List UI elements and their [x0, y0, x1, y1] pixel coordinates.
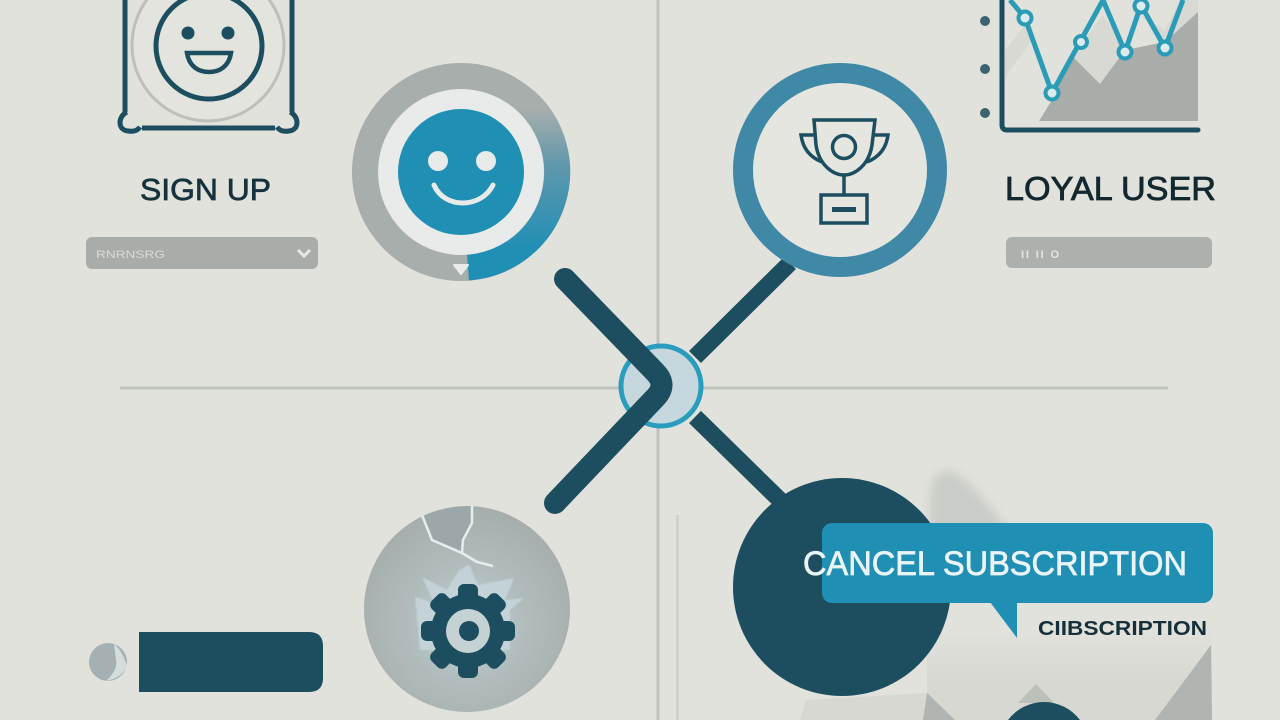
icon: gear — [421, 584, 515, 678]
callout: cancel subscription: CANCEL SUBSCRIPTION — [803, 545, 1187, 583]
dropdown: loyal user: II II O — [1021, 249, 1059, 261]
dropdown: loyal user — [1006, 237, 1212, 268]
icon: trophy — [801, 120, 888, 223]
dropdown: sign up — [86, 237, 318, 269]
arrow: chevron from sign up to cancel — [555, 279, 662, 503]
heading: sign up: SIGN UP — [140, 172, 271, 207]
connector arrows — [695, 263, 790, 510]
arrow: connector to loyal user — [695, 263, 790, 357]
arrow: connector to cancel subscription — [695, 417, 790, 510]
starburst — [415, 565, 524, 650]
line and area chart — [980, 0, 1198, 130]
center hub — [555, 279, 701, 503]
background shapes: faded mountains — [800, 470, 1212, 720]
icon: framed smiley — [120, 0, 297, 131]
bottom-left block — [89, 632, 323, 692]
dropdown: sign up: RNRNSRG — [96, 249, 165, 261]
icon: small blob — [89, 643, 127, 681]
panel: sign up — [86, 0, 318, 269]
callout: cancel subscription — [803, 523, 1213, 638]
node: broken gear — [364, 505, 570, 712]
node: smiley — [352, 63, 570, 281]
panel: loyal user — [980, 0, 1216, 268]
label: subscription: CIIBSCRIPTION — [1038, 618, 1207, 640]
heading: loyal user: LOYAL USER — [1005, 170, 1216, 207]
crack — [422, 505, 493, 566]
node: cancel subscription — [733, 478, 1213, 696]
dark bar — [139, 632, 323, 692]
node: trophy — [743, 73, 937, 267]
